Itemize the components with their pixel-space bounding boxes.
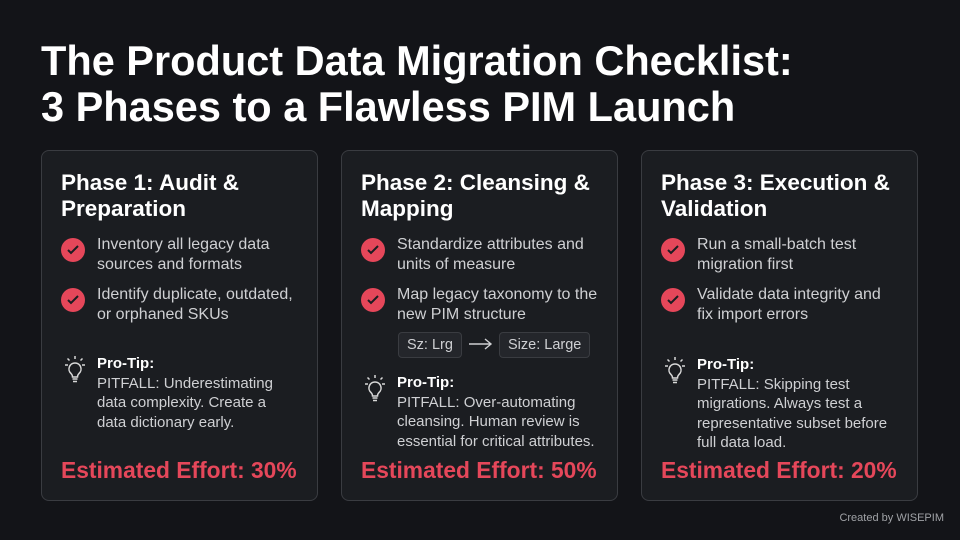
chip: Size Large: Size: Large <box>508 337 581 353</box>
bullet 1: Standardize attributes and <box>397 236 584 253</box>
icon: lightbulb <box>365 375 385 402</box>
icon: lightbulb <box>665 357 685 384</box>
heading phase 1: Preparation <box>61 196 186 221</box>
bullet 2: or orphaned SKUs <box>97 306 229 323</box>
bullet 2: Map legacy taxonomy to the <box>397 286 597 303</box>
pro tip: PITFALL: Over-automating <box>397 394 575 410</box>
heading phase 2 <box>361 170 590 221</box>
bullet 2: Validate data integrity and <box>697 286 881 303</box>
chip: Sz Lrg: Sz: Lrg <box>407 337 453 353</box>
heading phase 2: Phase 2: Cleansing & <box>361 170 590 195</box>
pro tip: cleansing. Human review is <box>397 413 580 430</box>
bullet 2 <box>661 286 881 323</box>
panel: phase 3 <box>641 150 918 501</box>
panel: phase 2 <box>341 150 618 501</box>
heading phase 1 <box>61 170 239 221</box>
title: 3 Phases to a Flawless PIM Launch <box>41 83 735 130</box>
heading phase 3: Phase 3: Execution & <box>661 170 890 195</box>
pro tip <box>65 355 273 430</box>
bullet 1: Run a small-batch test <box>697 236 856 253</box>
effort: Estimated Effort: 20% <box>661 457 897 483</box>
bullet 1: Inventory all legacy data <box>97 236 270 253</box>
pro tip <box>365 374 595 450</box>
effort: Estimated Effort: 30% <box>61 457 297 483</box>
bullet 2: Identify duplicate, outdated, <box>97 286 293 303</box>
pro tip: representative subset before <box>697 414 887 432</box>
bullet 1 <box>661 236 856 273</box>
arrow <box>469 338 492 350</box>
pro tip: PITFALL: Underestimating <box>97 374 273 392</box>
chip: Size Large <box>499 332 590 358</box>
heading phase 1: Phase 1: Audit & <box>61 170 239 195</box>
bullet 1: sources and formats <box>97 256 242 273</box>
bullet 2 <box>61 286 293 323</box>
bullet 1: units of measure <box>397 256 515 273</box>
heading phase 3: Validation <box>661 196 767 221</box>
pro tip: full data load. <box>697 434 786 451</box>
bullet 1 <box>61 236 270 273</box>
pro tip: Pro-Tip: <box>97 355 154 372</box>
pro tip: PITFALL: Skipping test <box>697 376 850 392</box>
pro tip: data complexity. Create a <box>97 394 266 411</box>
effort: Estimated Effort: 50% <box>361 457 597 483</box>
panel: phase 1 <box>41 150 318 501</box>
bullet 1 <box>361 236 584 273</box>
credit: Created by WISEPIM <box>839 512 944 524</box>
pro tip: migrations. Always test a <box>697 395 862 412</box>
pro tip: Pro-Tip: <box>397 374 454 391</box>
pro tip: essential for critical attributes. <box>397 432 595 450</box>
pro tip: data dictionary early. <box>97 414 234 430</box>
heading phase 3 <box>661 170 890 221</box>
icon: lightbulb <box>65 356 85 382</box>
title <box>41 37 793 130</box>
bullet 2: new PIM structure <box>397 306 526 323</box>
bullet 2 <box>361 286 597 323</box>
pro tip: Pro-Tip: <box>697 356 754 373</box>
pro tip <box>665 356 887 451</box>
chip: Sz Lrg <box>398 332 462 358</box>
title: The Product Data Migration Checklist: <box>41 37 793 84</box>
bullet 2: fix import errors <box>697 306 808 323</box>
bullet 1: migration first <box>697 256 793 273</box>
heading phase 2: Mapping <box>361 196 453 221</box>
